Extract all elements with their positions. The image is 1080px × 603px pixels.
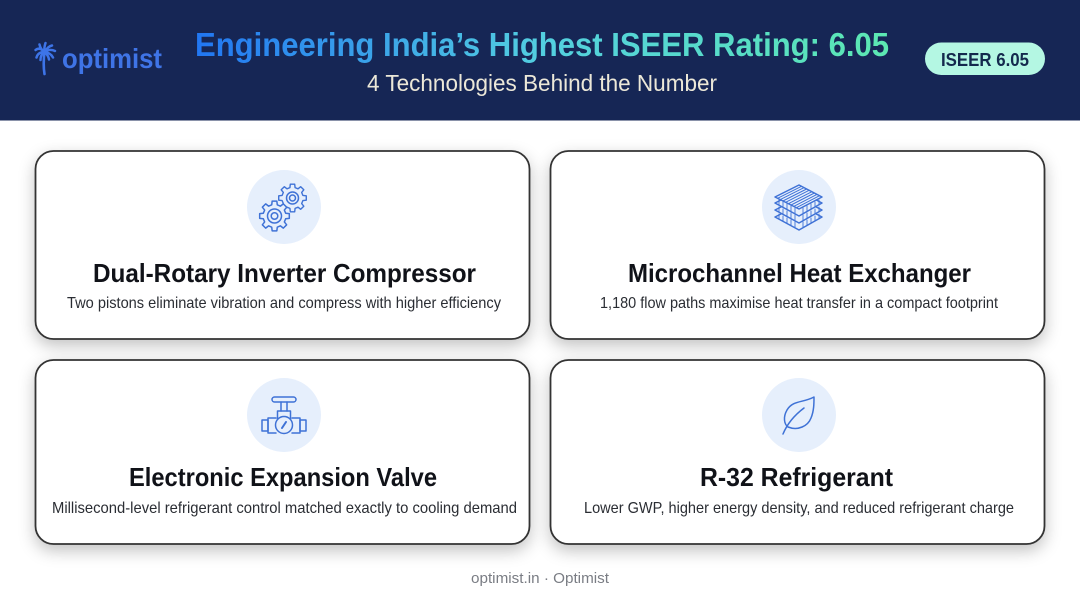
footer: optimist.in · Optimist [471, 570, 610, 587]
description: Lower GWP, higher energy density, and reduced refrigerant charge [584, 500, 1014, 517]
heading: Dual-Rotary Inverter Compressor [93, 258, 476, 288]
badge: ISEER 6.05: ISEER 6.05 [941, 50, 1029, 70]
panel: microchannel heat exchanger [550, 151, 1044, 339]
panel: R-32 refrigerant [550, 360, 1044, 544]
heading: R-32 Refrigerant [700, 462, 893, 492]
panel: electronic expansion valve [36, 360, 530, 544]
icon: palm tree [36, 43, 55, 74]
icon: gears [247, 170, 321, 244]
icon: valve [247, 378, 321, 452]
heading: Microchannel Heat Exchanger [628, 258, 971, 288]
description: Millisecond-level refrigerant control matched exactly to cooling demand [52, 500, 517, 517]
heading: Electronic Expansion Valve [129, 462, 437, 492]
icon: leaf [762, 378, 836, 452]
description: 1,180 flow paths maximise heat transfer in a compact footprint [600, 295, 999, 312]
icon: stacked layers [762, 170, 836, 244]
subtitle: 4 Technologies Behind the Number [367, 70, 717, 96]
badge: ISEER 6.05 [925, 42, 1045, 75]
logo: optimist: optimist [62, 43, 162, 74]
title: Engineering India’s Highest ISEER Rating: 6.05 [195, 26, 889, 63]
description: Two pistons eliminate vibration and compress with higher efficiency [67, 295, 501, 312]
panel: dual-rotary compressor [36, 151, 530, 339]
header band [0, 0, 1080, 120]
